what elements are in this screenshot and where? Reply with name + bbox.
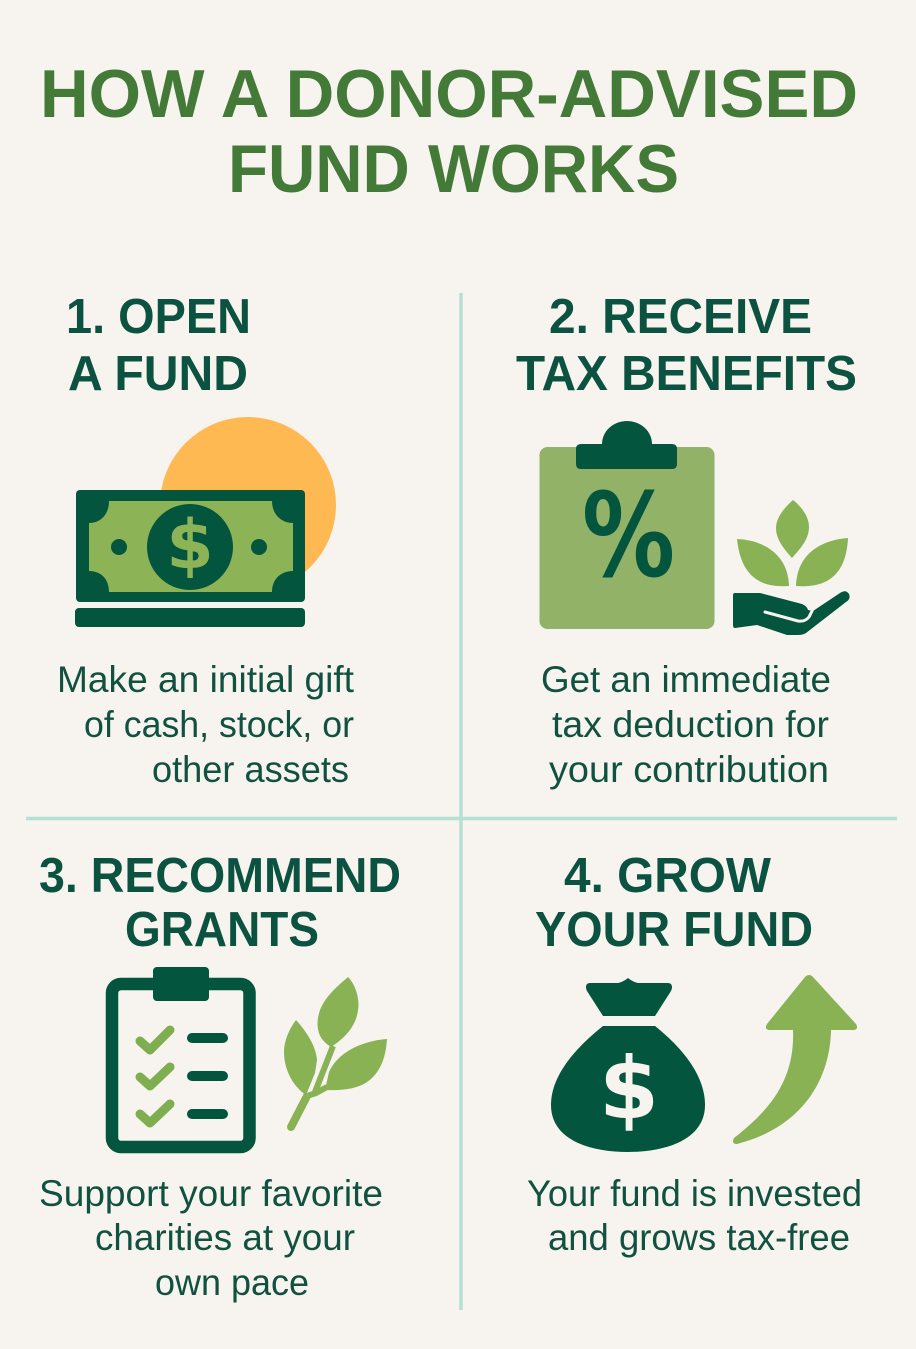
text: step 4 description: Your fund is invested [527,1173,862,1214]
text: step 4 description [527,1173,862,1258]
heading: step 2: TAX BENEFITS [516,347,857,401]
icon: hand holding leaves [733,500,850,635]
heading: step 4 [535,849,813,957]
heading: step 1: 1. OPEN [66,290,251,344]
heading: step 1: A FUND [68,347,248,401]
text: step 4 description: and grows tax-free [548,1217,850,1258]
title: FUND WORKS [228,131,679,207]
icon: clipboard with percent sign [540,421,714,629]
title [40,56,858,207]
text: step 1 description: Make an initial gift [57,659,355,700]
text: step 3 description: charities at your [95,1217,355,1258]
icon: banknote with orange sun [75,417,336,627]
text: step 3 description [39,1173,383,1303]
heading: step 3: 3. RECOMMEND [39,849,401,903]
panel: step 3 recommend grants [39,849,401,1303]
text: step 2 description: tax deduction for [552,704,829,745]
icon: banknote with orange sun: $ [166,506,214,585]
title: HOW A DONOR-ADVISED [40,56,858,132]
icon: clipboard with percent sign: % [582,469,675,604]
heading: step 2: 2. RECEIVE [549,290,812,344]
icon: green sprig [284,977,387,1127]
heading: step 2 [516,290,857,401]
icon: money bag: $ [599,1039,659,1139]
heading: step 1 [66,290,251,401]
panel: step 4 grow your fund [527,849,862,1258]
text: step 2 description: your contribution [549,749,829,790]
icon: money bag [551,978,705,1152]
heading: step 4: YOUR FUND [535,903,813,957]
heading: step 4: 4. GROW [564,849,772,903]
panel: step 1 open a fund [57,290,355,790]
text: step 1 description: other assets [152,749,349,790]
text: step 1 description [57,659,355,790]
heading: step 3: GRANTS [125,903,319,957]
text: step 3 description: Support your favorite [39,1173,383,1214]
text: step 3 description: own pace [155,1262,309,1303]
arrow: growth arrow [733,975,857,1144]
text: step 2 description: Get an immediate [541,659,831,700]
panel: step 2 receive tax benefits [516,290,857,790]
heading: step 3 [39,849,401,957]
text: step 1 description: of cash, stock, or [84,704,354,745]
text: step 2 description [541,659,831,790]
icon: checklist clipboard [112,967,250,1147]
